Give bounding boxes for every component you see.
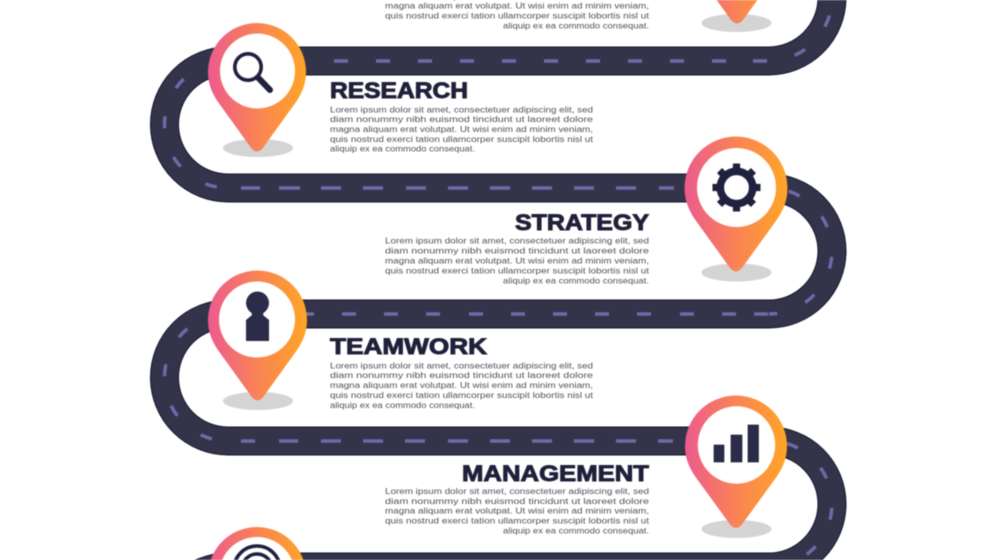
icon: target <box>234 546 280 560</box>
text block: top cropped step: quis nostrud exerci tation ullamcorper suscipit lobortis nisl ut <box>385 12 650 21</box>
text block: strategy: aliquip ex ea commodo consequat. <box>503 276 649 285</box>
text block: strategy <box>385 237 650 285</box>
text block: top cropped step: aliquip ex ea commodo consequat. <box>503 22 649 31</box>
text block: management: aliquip ex ea commodo consequat. <box>503 527 649 536</box>
text block: top cropped step: magna aliquam erat volutpat. Ut wisi enim ad minim veniam, <box>385 2 649 11</box>
pin: teamwork <box>208 271 307 410</box>
pin: top cropped <box>686 0 788 32</box>
text block: strategy: Lorem ipsum dolor sit amet, consectetuer adipiscing elit, sed <box>385 237 649 246</box>
text block: top cropped step <box>385 0 650 31</box>
heading: research: RESEARCH <box>330 78 468 103</box>
text block: research: aliquip ex ea commodo consequat. <box>330 145 475 154</box>
pin: strategy <box>685 137 787 282</box>
text block: teamwork: aliquip ex ea commodo consequat. <box>330 401 475 410</box>
text block: strategy: quis nostrud exerci tation ullamcorper suscipit lobortis nisl ut <box>385 266 650 275</box>
text block: teamwork <box>330 361 594 410</box>
heading: management: MANAGEMENT <box>462 461 650 486</box>
text block: management: Lorem ipsum dolor sit amet, consectetuer adipiscing elit, sed <box>385 487 649 496</box>
text block: management <box>385 487 650 536</box>
text block: strategy: diam nonummy nibh euismod tincidunt ut laoreet dolore <box>385 247 650 256</box>
text block: teamwork: diam nonummy nibh euismod tincidunt ut laoreet dolore <box>330 371 594 380</box>
text block: research <box>330 106 594 154</box>
pin: bottom cropped <box>208 527 306 560</box>
text block: management: magna aliquam erat volutpat. Ut wisi enim ad minim veniam, <box>385 507 649 516</box>
road lane dashes <box>164 0 832 560</box>
text block: management: quis nostrud exerci tation ullamcorper suscipit lobortis nisl ut <box>385 517 650 526</box>
icon: bar chart <box>714 425 758 462</box>
pin: management <box>685 396 787 538</box>
text block: teamwork: quis nostrud exerci tation ullamcorper suscipit lobortis nisl ut <box>330 391 594 400</box>
winding road <box>164 0 832 560</box>
icon: person <box>246 292 269 341</box>
text block: teamwork: Lorem ipsum dolor sit amet, consectetuer adipiscing elit, sed <box>330 361 593 370</box>
pin: research <box>208 23 306 157</box>
heading: strategy: STRATEGY <box>515 210 649 235</box>
heading: teamwork: TEAMWORK <box>330 334 487 359</box>
text block: research: magna aliquam erat volutpat. Ut wisi enim ad minim veniam, <box>330 125 593 134</box>
icon: magnifying glass <box>235 54 270 90</box>
text block: research: Lorem ipsum dolor sit amet, consectetuer adipiscing elit, sed <box>330 106 593 114</box>
text block: research: diam nonummy nibh euismod tincidunt ut laoreet dolore <box>330 115 594 124</box>
text block: strategy: magna aliquam erat volutpat. Ut wisi enim ad minim veniam, <box>385 256 649 266</box>
text block: teamwork: magna aliquam erat volutpat. Ut wisi enim ad minim veniam, <box>330 381 593 390</box>
text block: research: quis nostrud exerci tation ullamcorper suscipit lobortis nisl ut <box>330 135 594 144</box>
text block: management: diam nonummy nibh euismod tincidunt ut laoreet dolore <box>385 497 650 506</box>
icon: gear <box>712 164 760 212</box>
